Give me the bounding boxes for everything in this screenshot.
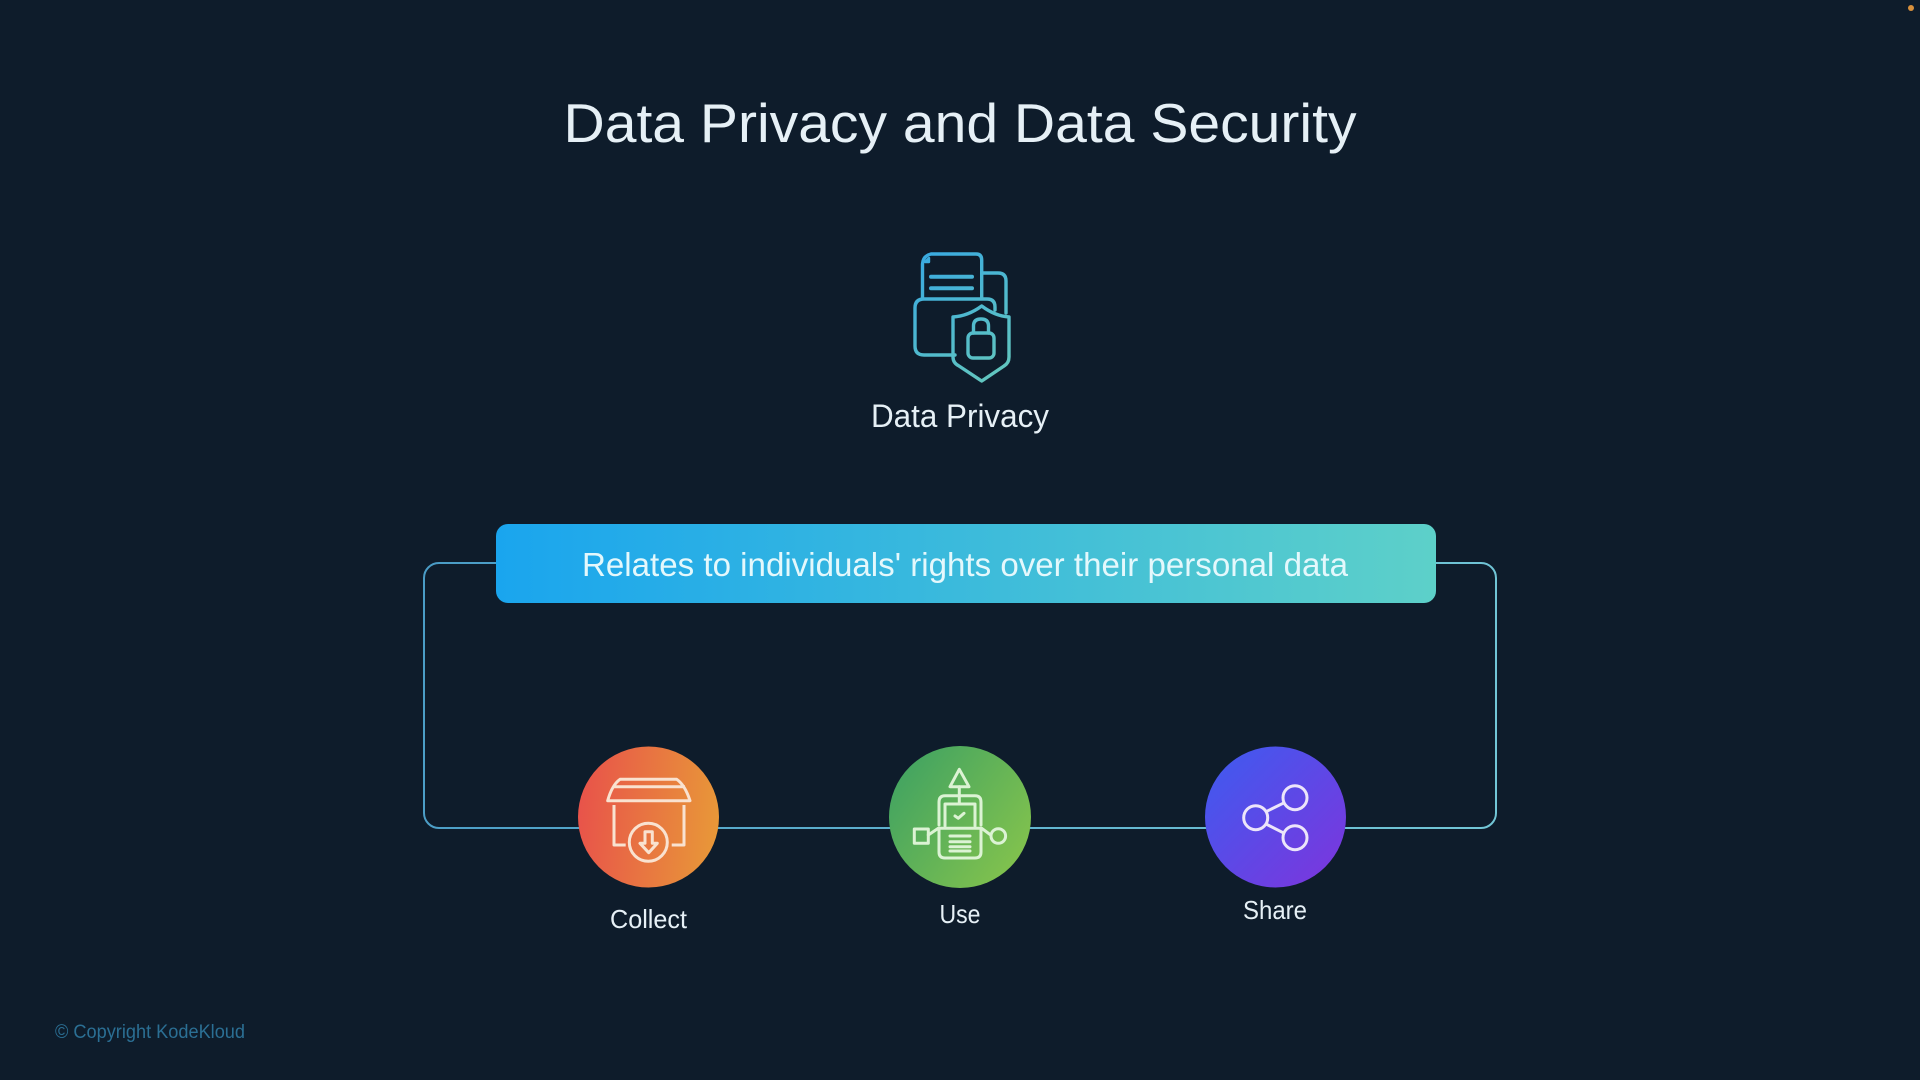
corner dot [1908, 5, 1914, 11]
copyright: © Copyright KodeKloud [55, 1022, 245, 1043]
icon: box with download arrow [608, 779, 690, 861]
label: use: Use [940, 899, 980, 929]
banner text: Relates to individuals' rights over their personal data [582, 546, 1349, 583]
icon: share nodes [1244, 786, 1307, 850]
connector frame [424, 563, 1496, 828]
step: use [889, 746, 1031, 888]
label: share: Share [1243, 895, 1307, 925]
step: collect [578, 746, 719, 888]
icon: workflow [914, 769, 1006, 858]
step: share [1205, 746, 1346, 888]
title: Data Privacy and Data Security [564, 92, 1357, 154]
banner [496, 524, 1436, 603]
label: collect: Collect [610, 904, 688, 934]
heading: data privacy: Data Privacy [871, 398, 1049, 434]
icon: data privacy document, folder and shield [915, 254, 1009, 381]
